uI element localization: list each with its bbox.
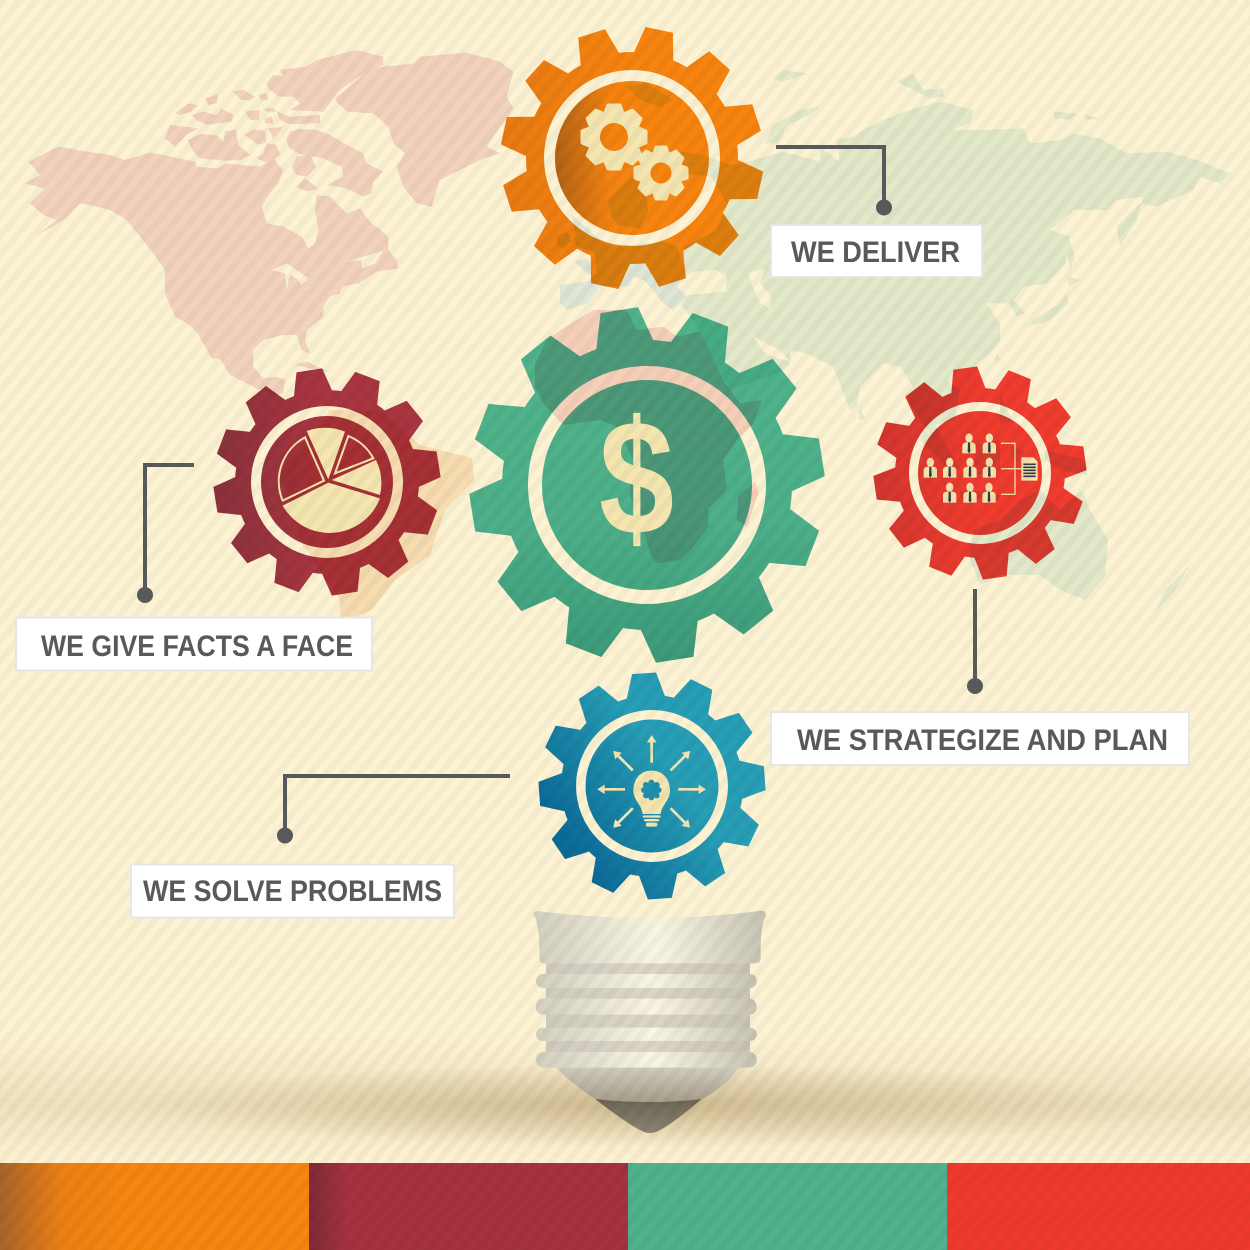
icon: team and document	[924, 433, 1038, 503]
icon: pie chart	[279, 428, 381, 533]
connector: we give facts a face	[137, 465, 194, 603]
map: North America and Greenland	[25, 53, 513, 395]
bulb tapered end	[557, 1068, 738, 1102]
gear: green	[469, 307, 825, 663]
bulb contact tip	[595, 1099, 702, 1133]
floor shadow	[0, 1035, 1250, 1163]
map: South America	[280, 410, 474, 622]
bulb thread ribs	[536, 974, 757, 1068]
label: we give facts a face: WE GIVE FACTS A FACE	[41, 630, 353, 663]
connector: we solve problems	[277, 776, 510, 844]
map: Africa	[535, 310, 762, 563]
label: we strategize and plan	[771, 712, 1189, 765]
label: we strategize and plan: WE STRATEGIZE AND PLAN	[797, 724, 1168, 757]
colour bar	[0, 1163, 1250, 1250]
icon: two cogs	[582, 105, 687, 199]
label: we deliver	[771, 225, 982, 277]
label: we solve problems: WE SOLVE PROBLEMS	[143, 875, 442, 908]
map: Europe	[557, 177, 687, 310]
connector: we deliver	[776, 147, 892, 216]
gear: orange	[501, 27, 763, 289]
map: Eurasia	[627, 70, 1230, 420]
light bulb base	[533, 911, 766, 1133]
icon: idea bulb with arrows	[597, 735, 706, 831]
bulb collar	[533, 911, 766, 963]
gear: red	[873, 366, 1087, 580]
world map	[25, 50, 1230, 622]
label: we solve problems	[131, 864, 454, 918]
bulb neck	[546, 962, 750, 1055]
label: we give facts a face	[16, 618, 372, 670]
map: South-East Asia and Australia	[905, 370, 1190, 612]
gear: blue	[538, 672, 766, 900]
connector: we strategize and plan	[967, 589, 983, 694]
map: Arctic islands	[165, 50, 383, 197]
gear: maroon	[213, 368, 441, 596]
label: we deliver: WE DELIVER	[791, 236, 960, 269]
icon: dollar sign: $	[599, 386, 674, 569]
